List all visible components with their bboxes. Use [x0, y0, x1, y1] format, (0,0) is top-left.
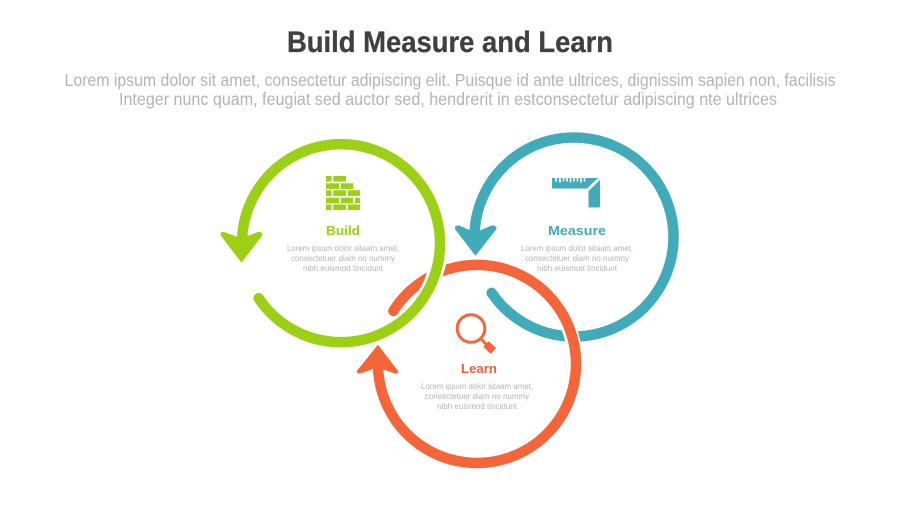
text: learn: consectetuer diam no nummy — [425, 391, 530, 401]
title: Build Measure and Learn — [287, 26, 613, 59]
text: learn — [421, 361, 533, 411]
text: build: nibh euismod tincidunt — [303, 263, 384, 273]
text: measure: Lorem ipsum dolor sitaam amet, — [521, 243, 633, 253]
subtitle — [64, 70, 836, 109]
arrow: build circle — [221, 144, 440, 342]
text: measure — [521, 223, 633, 273]
icon: ruler — [552, 178, 600, 208]
text: measure: nibh euismod tincidunt — [537, 263, 618, 273]
text: build: consectetuer diam no nummy — [291, 253, 396, 263]
text: learn: Learn — [461, 361, 497, 376]
text: measure: consectetuer diam no nummy — [525, 253, 630, 263]
text: learn: nibh euismod tincidunt — [437, 401, 518, 411]
text: build: Build — [326, 223, 360, 238]
subtitle: Lorem ipsum dolor sit amet, consectetur adipiscing elit. Puisque id ante ultrices, dignissim sapien non, facilisis — [64, 70, 836, 90]
icon: magnifier — [457, 315, 494, 351]
arrow: learn circle — [357, 264, 576, 463]
text: learn: Lorem ipsum dolor sitaam amet, — [421, 381, 533, 391]
arrow: measure circle — [455, 137, 673, 336]
text: measure: Measure — [548, 223, 606, 238]
text: build: Lorem ipsum dolor sitaam amet, — [287, 243, 399, 253]
icon: bricks — [326, 176, 360, 210]
subtitle: Integer nunc quam, feugiat sed auctor sed, hendrerit in estconsectetur adipiscing nte ultrices — [119, 89, 777, 109]
text: build — [287, 223, 399, 273]
